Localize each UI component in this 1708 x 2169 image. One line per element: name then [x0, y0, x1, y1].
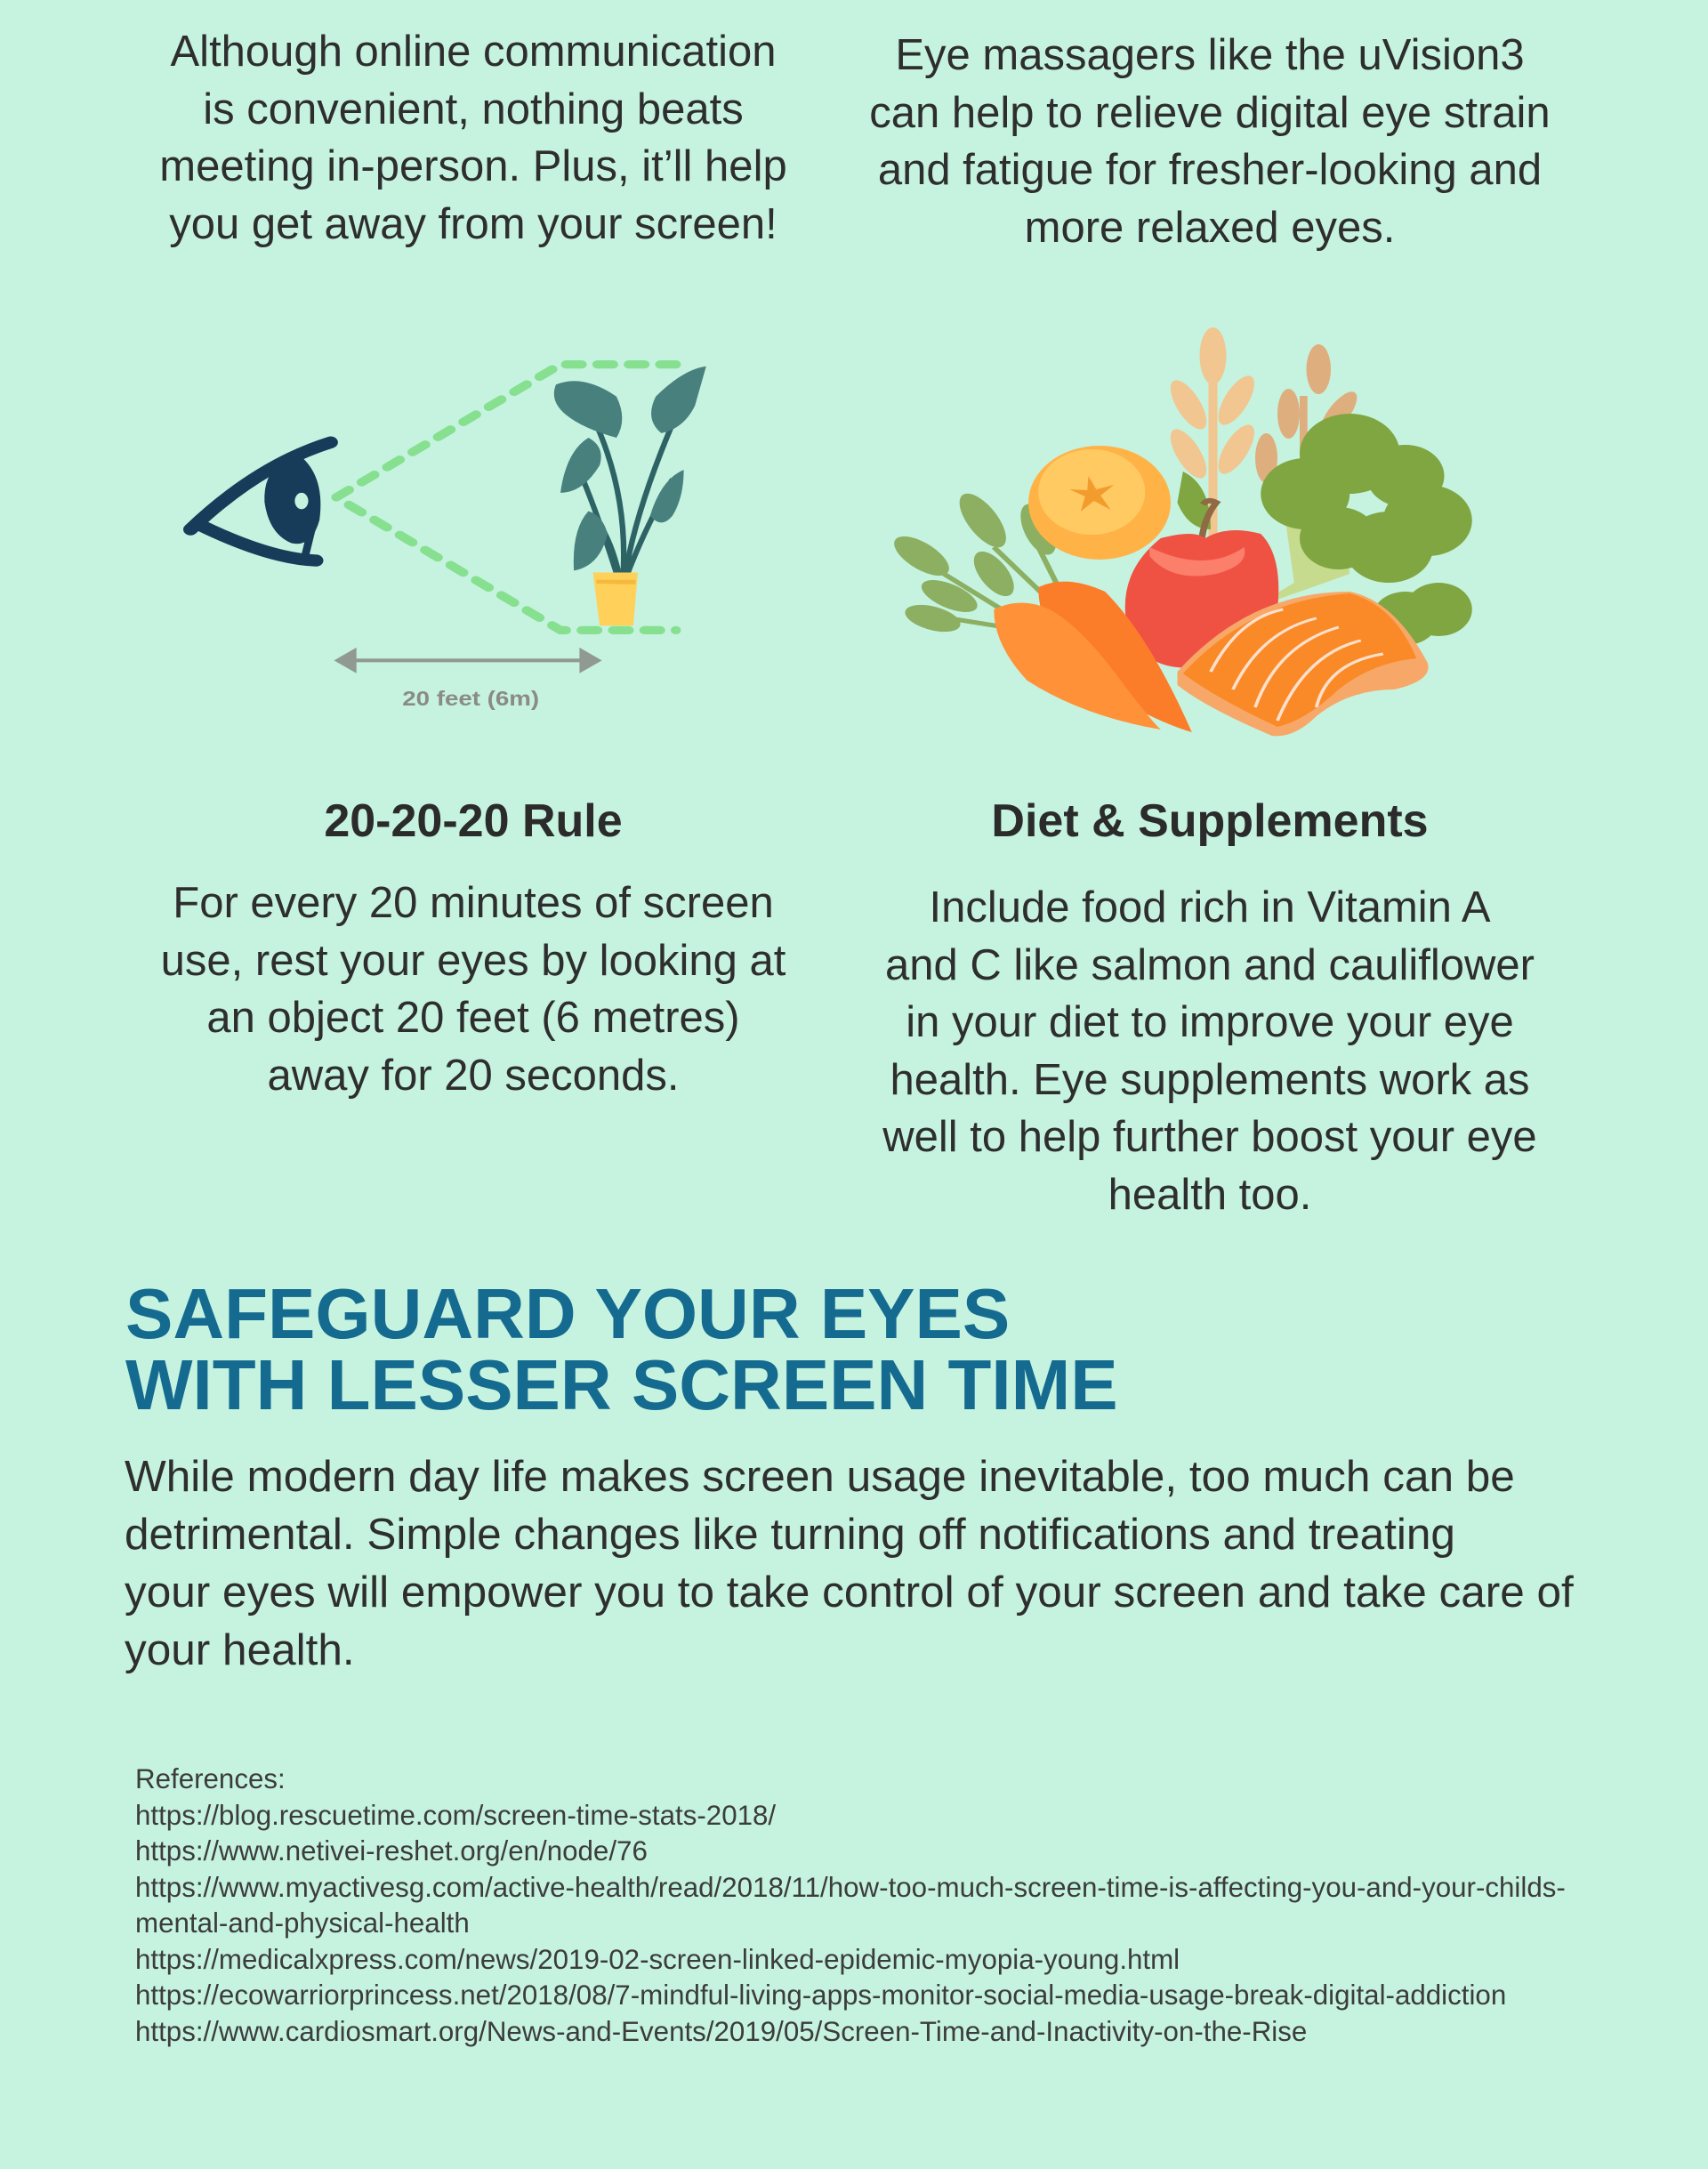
apple [1125, 501, 1278, 667]
title: safeguard your eyes [125, 1274, 1118, 1424]
carrots [994, 582, 1192, 732]
broccoli [1250, 414, 1472, 645]
text block: conclusion paragraph [125, 1452, 1574, 1674]
text block: conclusion paragraph: detrimental. Simple changes like turning off notifications and treating [125, 1510, 1455, 1559]
dashed sightlines [336, 365, 676, 630]
references list: https://ecowarriorprincess.net/2018/08/7-mindful-living-apps-monitor-social-media-usage-break-digital-addiction [135, 1980, 1506, 2011]
title: safeguard your eyes: SAFEGUARD YOUR EYES [125, 1274, 1010, 1353]
text block: eye massagers: and fatigue for fresher-looking and [878, 146, 1542, 194]
text block: conclusion paragraph: While modern day life makes screen usage inevitable, too much can be [125, 1452, 1515, 1501]
text block: eye massagers: can help to relieve digital eye strain [869, 89, 1551, 137]
text block: 20-20-20 rule description: away for 20 seconds. [267, 1052, 680, 1100]
arrow: 20 feet distance [334, 648, 602, 673]
salmon [1178, 592, 1429, 736]
text block: diet description: and C like salmon and cauliflower [885, 941, 1535, 989]
text block: meet in person: you get away from your screen! [169, 199, 777, 247]
text block: meet in person: Although online communication [171, 28, 776, 76]
text block: meet in person: is convenient, nothing beats [203, 85, 744, 133]
label: 20 feet (6m): 20 feet (6m) [402, 688, 539, 710]
text block: 20-20-20 rule description: use, rest your eyes by looking at [161, 936, 786, 984]
references list: https://blog.rescuetime.com/screen-time-stats-2018/ [135, 1799, 776, 1831]
text block: diet description: well to help further boost your eye [882, 1113, 1537, 1161]
references list [135, 1763, 1566, 2046]
heading: 20-20-20 Rule: 20-20-20 Rule [324, 795, 623, 847]
illustration: 20-20-20 rule eye and plant [183, 360, 706, 710]
text block: diet description [882, 883, 1537, 1219]
references list: References: [135, 1763, 286, 1794]
references list: https://www.netivei-reshet.org/en/node/76 [135, 1835, 648, 1867]
references list: https://www.cardiosmart.org/News-and-Events/2019/05/Screen-Time-and-Inactivity-on-the-Rise [135, 2016, 1307, 2046]
text block: diet description: health. Eye supplements work as [890, 1055, 1530, 1103]
text block: diet description: health too. [1108, 1171, 1311, 1219]
text block: 20-20-20 rule description: an object 20 feet (6 metres) [206, 994, 740, 1042]
heading: Diet & Supplements: Diet & Supplements [991, 795, 1429, 847]
text block: 20-20-20 rule description: For every 20 minutes of screen [173, 879, 774, 927]
illustration: healthy foods [894, 327, 1472, 737]
text block: eye massagers: Eye massagers like the uVision3 [895, 31, 1525, 79]
text block: meet in person: meeting in-person. Plus, it’ll help [159, 142, 787, 190]
references list: mental-and-physical-health [135, 1907, 470, 1939]
icon: potted plant [554, 367, 706, 625]
orange [1028, 446, 1171, 560]
wheat [1164, 327, 1261, 556]
icon: eye [190, 442, 331, 560]
text block: eye massagers [869, 31, 1551, 251]
references list: https://medicalxpress.com/news/2019-02-screen-linked-epidemic-myopia-young.html [135, 1943, 1180, 1975]
text block: eye massagers: more relaxed eyes. [1025, 203, 1395, 251]
title: safeguard your eyes: WITH LESSER SCREEN TIME [125, 1345, 1118, 1424]
text block: conclusion paragraph: your health. [125, 1625, 355, 1674]
references list: https://www.myactivesg.com/active-health/read/2018/11/how-too-much-screen-time-is-affecting-you-and-your-childs- [135, 1872, 1566, 1902]
text block: conclusion paragraph: your eyes will empower you to take control of your screen and take care of [125, 1568, 1574, 1617]
text block: 20-20-20 rule description [161, 879, 786, 1100]
carrot leaves [886, 488, 1063, 637]
text block: diet description: in your diet to improve your eye [906, 998, 1514, 1046]
leaf [1178, 472, 1211, 529]
text block: diet description: Include food rich in Vitamin A [929, 883, 1491, 931]
text block: meet in person [159, 28, 787, 247]
